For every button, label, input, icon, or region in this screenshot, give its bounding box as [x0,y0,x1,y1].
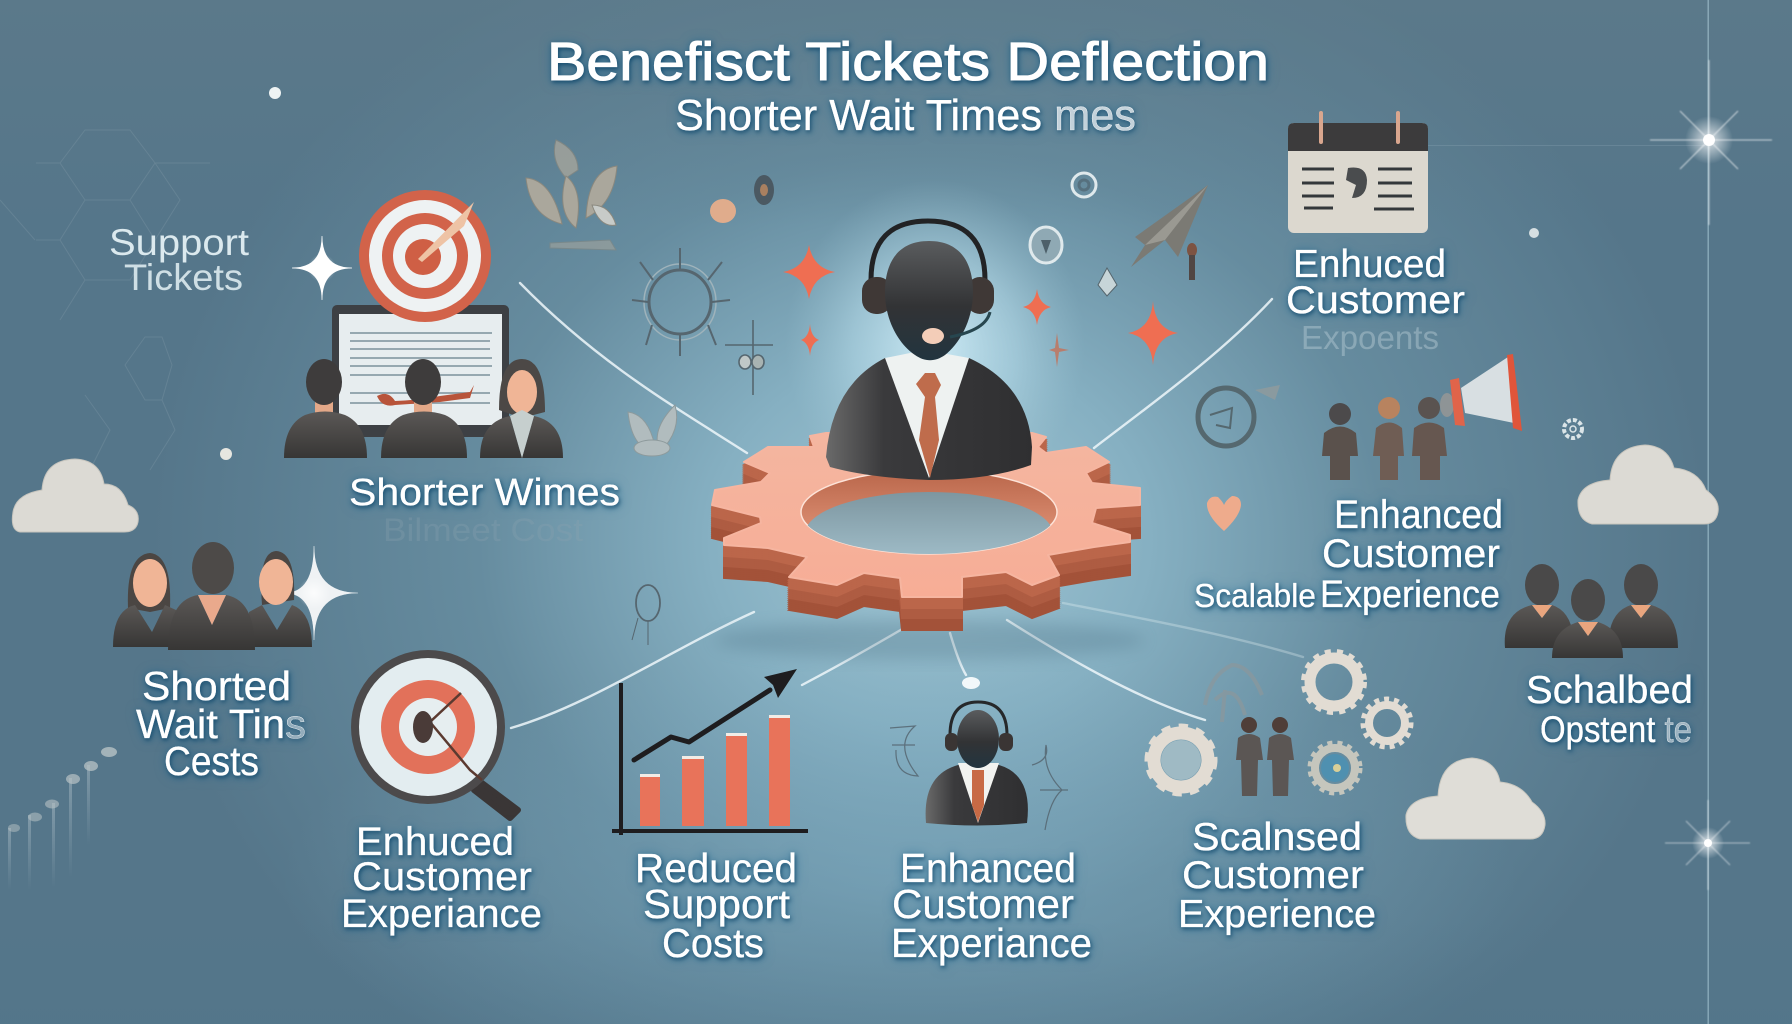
title [547,32,1269,140]
two people [1236,717,1294,796]
label: enhuced customer experiance left: Experiance [341,892,542,936]
label: shorted wait tins cests [136,663,306,784]
label: enhanced customer scalable experience: Experience [1320,574,1500,616]
label: enhuced customer experiance left: Customer [352,855,532,899]
icon: pin figure [1187,243,1197,280]
icon: paper plane [1131,185,1208,267]
icon: magnifier target [351,650,518,818]
audience [284,359,563,458]
small decorative icons around centre [526,140,1208,645]
icon: target with presentation board and audience [284,190,563,458]
gear [712,433,1145,660]
label: schalbed opstent [1526,669,1693,750]
label: enhanced customer experiance center: Customer [892,881,1074,927]
label: enhuced customer expoents top right: Expoents [1301,319,1439,356]
label: reduced support costs: Reduced [635,845,797,891]
head [885,241,973,360]
icon: cloud bottom right [1406,758,1545,839]
label: shorted wait tins cests: Shorted [142,663,291,709]
megaphone [1440,354,1522,431]
board [332,305,509,437]
people [1322,397,1447,480]
ear cups [862,277,994,314]
tie [916,373,941,478]
icon: megaphone and three people [1322,354,1522,480]
label: shorter wimes: Shorter Wimes [349,472,620,514]
icon: balloon [632,585,660,645]
icon: group of three people left [113,542,312,650]
label: schalbed opstent: Opstent te [1540,709,1692,750]
headset band [871,221,985,280]
label: enhanced customer experiance center: Enhanced [900,845,1076,891]
label: enhuced customer expoents top right: Customer [1286,279,1465,322]
label: enhuced customer experiance left [341,820,542,936]
decorative sparkles [220,60,1772,890]
support tickets label [109,222,250,298]
connector lines [511,283,1303,728]
label: shorter wimes: Bilmeet Cost [383,512,583,548]
title: Benefisct Tickets Deflection [547,32,1269,92]
support tickets label: Support [109,222,250,263]
icon: cloud top right [1578,445,1718,524]
label: shorted wait tins cests: Cests [164,738,259,784]
label: shorter wimes [349,472,620,548]
label: reduced support costs [635,845,797,966]
icon: grey leaf [628,405,677,456]
decorative fading bars [8,747,117,890]
support tickets label: Tickets [124,257,243,298]
icon: small crystal [1098,268,1117,296]
icon: calendar [1288,113,1428,233]
icon: ring with scribble [1198,385,1280,446]
label: enhuced customer expoents top right: Enhuced [1293,243,1446,286]
icon: leaves [526,140,617,250]
icon: tan blob [710,199,736,223]
small support agent icon [890,702,1068,830]
label: reduced support costs: Costs [662,920,764,966]
icon: cloud left [12,459,138,532]
microphone [922,312,990,344]
label: enhanced customer scalable experience: Customer [1322,532,1500,576]
central agent on gear [712,221,1145,660]
icon: heart [1207,496,1241,531]
label: enhanced customer experiance center [891,845,1092,966]
icon: small gear outline [1564,420,1582,438]
icon: broken ring [632,248,730,356]
label: scalnsed customer experience [1178,816,1376,936]
halo [785,180,1085,510]
arrow [634,669,797,760]
label: schalbed opstent: Schalbed [1526,669,1693,712]
icon: shield badge [1030,227,1062,263]
icon: coral stars [783,245,1178,367]
label: enhanced customer scalable experience [1194,493,1503,616]
label: enhuced customer experiance left: Enhuced [356,820,514,864]
subtitle: Shorter Wait Times mes [675,91,1136,140]
label: enhanced customer experiance center: Experiance [891,920,1092,966]
label: enhanced customer scalable experience: Scalable [1194,577,1316,614]
icon: group of three people right [1505,564,1678,658]
label: enhuced customer expoents top right [1286,243,1465,356]
scribble [1205,665,1262,722]
label: scalnsed customer experience: Experience [1178,893,1376,936]
icon: ring badge [1072,173,1096,197]
icon: gears and two people [1148,652,1411,796]
target [359,190,491,322]
icon: dark badge [754,175,774,205]
gears [1148,652,1411,793]
bar chart with rising arrow [612,669,808,835]
label: shorted wait tins cests: Wait Tins [136,701,306,747]
label: scalnsed customer experience: Customer [1182,854,1364,897]
label: reduced support costs: Support [643,881,791,927]
icon: cross flower [725,320,773,395]
label: scalnsed customer experience: Scalnsed [1192,816,1362,859]
label: enhanced customer scalable experience: Enhanced [1334,493,1503,537]
body [826,350,1032,480]
